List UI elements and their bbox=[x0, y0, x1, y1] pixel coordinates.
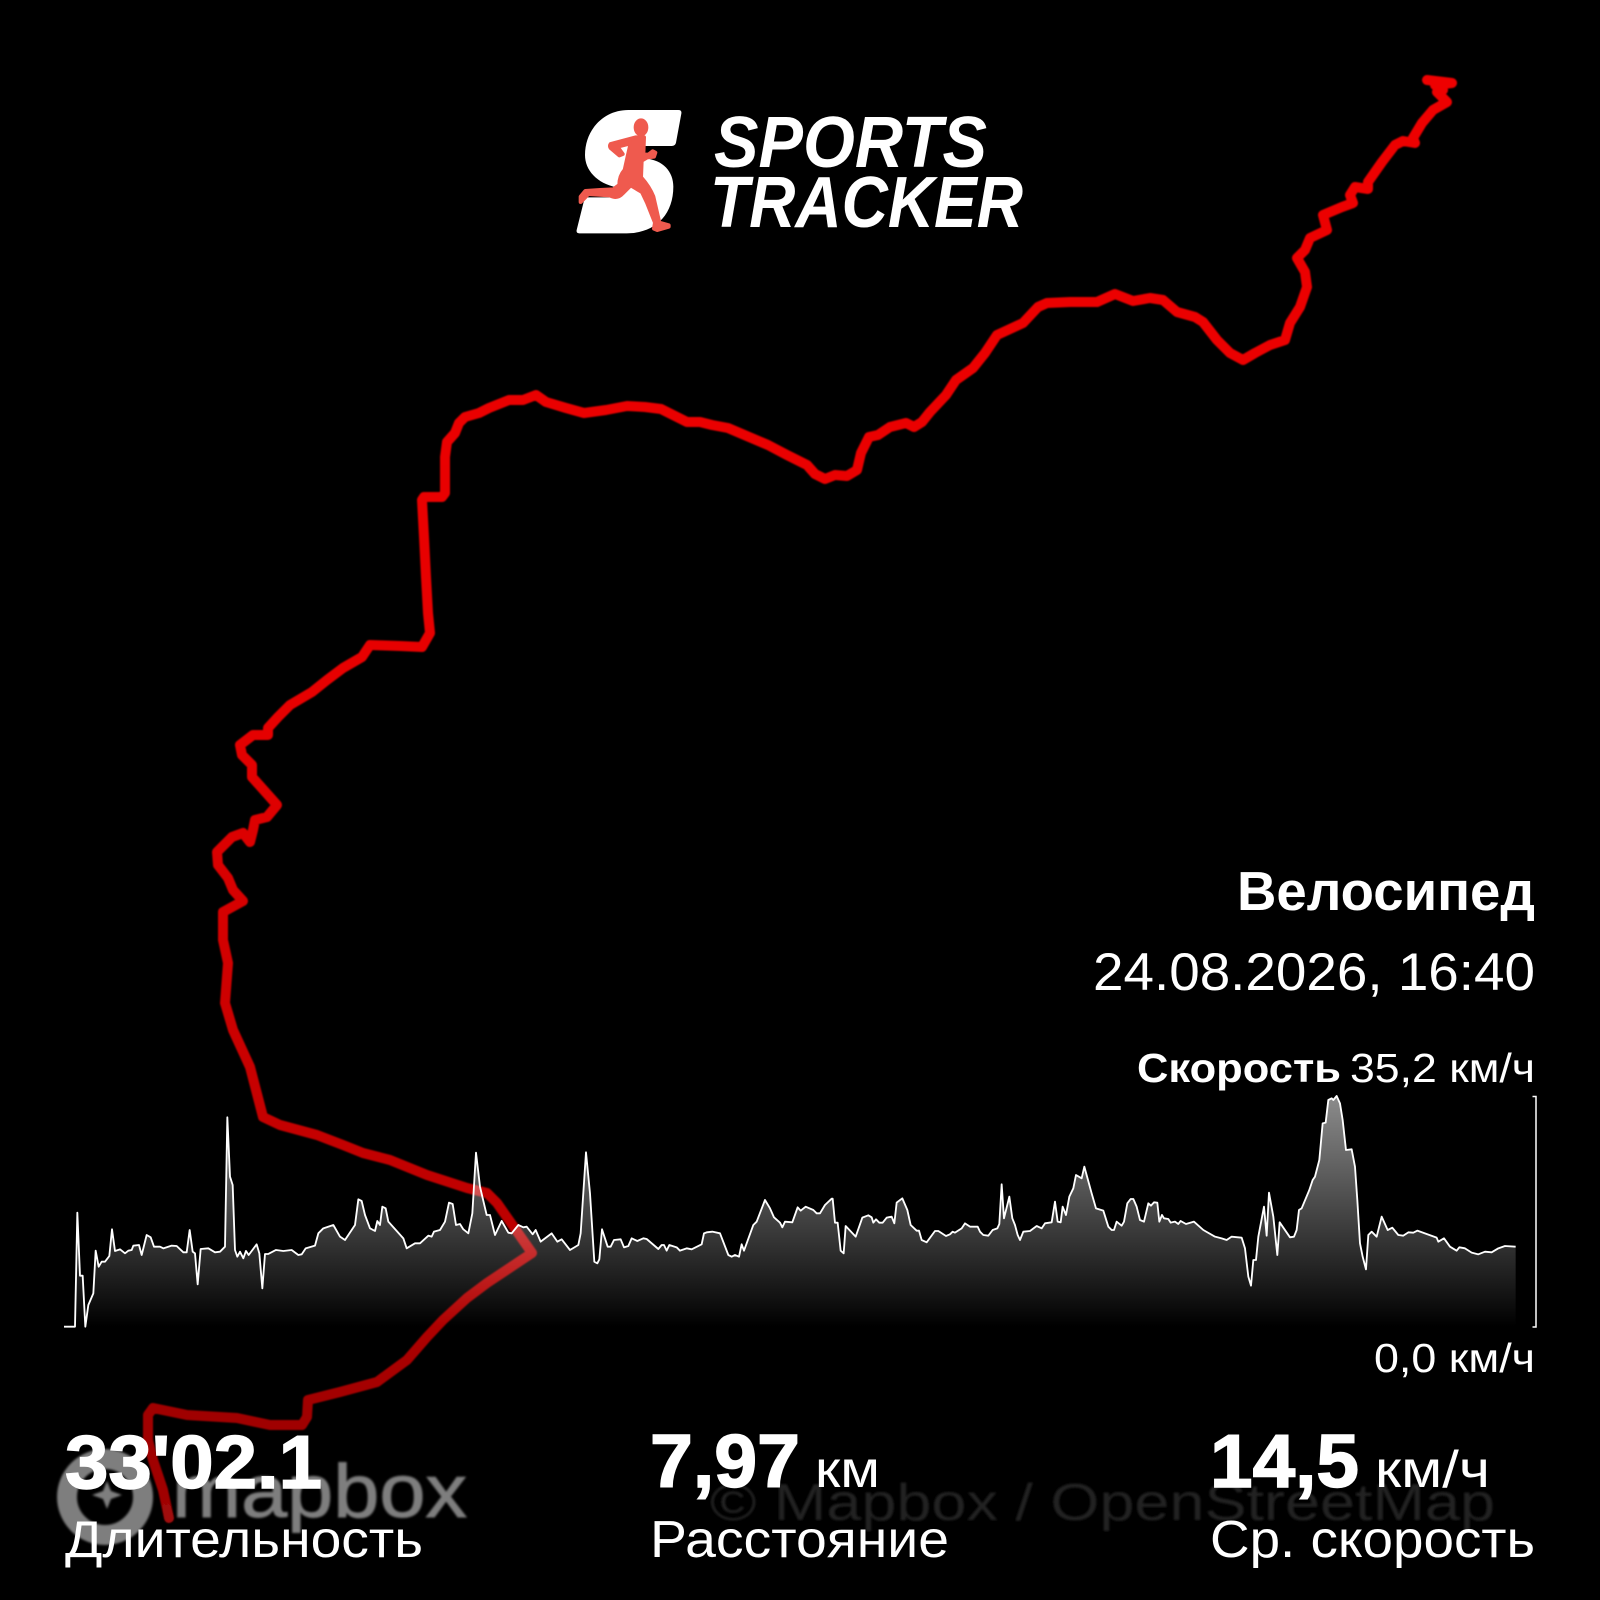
speed chart line bbox=[64, 1096, 1516, 1327]
stat: average speed: км/ч bbox=[1375, 1441, 1490, 1499]
stat: distance bbox=[650, 1419, 949, 1569]
stat: average speed: 14,5 bbox=[1210, 1419, 1359, 1503]
logo wordmark: TRACKER bbox=[710, 163, 1023, 243]
logo wordmark: SPORTS bbox=[714, 103, 987, 183]
stat: duration: Длительность bbox=[65, 1511, 423, 1569]
speed chart bbox=[64, 1096, 1516, 1327]
max speed label bbox=[1137, 1045, 1535, 1091]
logo: Sports Tracker bbox=[577, 103, 1023, 243]
activity type: Велосипед bbox=[1237, 860, 1535, 922]
stat: distance: 7,97 bbox=[650, 1419, 800, 1503]
stat: distance: Расстояние bbox=[650, 1511, 949, 1569]
stat: duration: 33'02.1 bbox=[65, 1420, 322, 1504]
map attribution watermark: © Mapbox / OpenStreetMap bbox=[710, 1474, 1495, 1532]
mapbox logo watermark bbox=[67, 1449, 467, 1535]
mapbox logo watermark: mapbox bbox=[172, 1449, 467, 1533]
stat: average speed: Ср. скорость bbox=[1210, 1511, 1535, 1569]
stat: duration bbox=[65, 1420, 423, 1569]
max speed label: 35,2 км/ч bbox=[1350, 1045, 1535, 1091]
min speed label: 0,0 км/ч bbox=[1374, 1335, 1535, 1381]
speed chart area fill bbox=[75, 1096, 1516, 1327]
GPS route line bbox=[148, 80, 1452, 1518]
stat: average speed bbox=[1210, 1419, 1535, 1569]
logo mark: S with runner bbox=[577, 110, 681, 233]
max speed label: Скорость bbox=[1137, 1045, 1341, 1091]
activity date: 24.08.2026, 16:40 bbox=[1093, 943, 1535, 1002]
stat: distance: км bbox=[815, 1441, 880, 1499]
chart scale bracket bbox=[1532, 1096, 1536, 1327]
